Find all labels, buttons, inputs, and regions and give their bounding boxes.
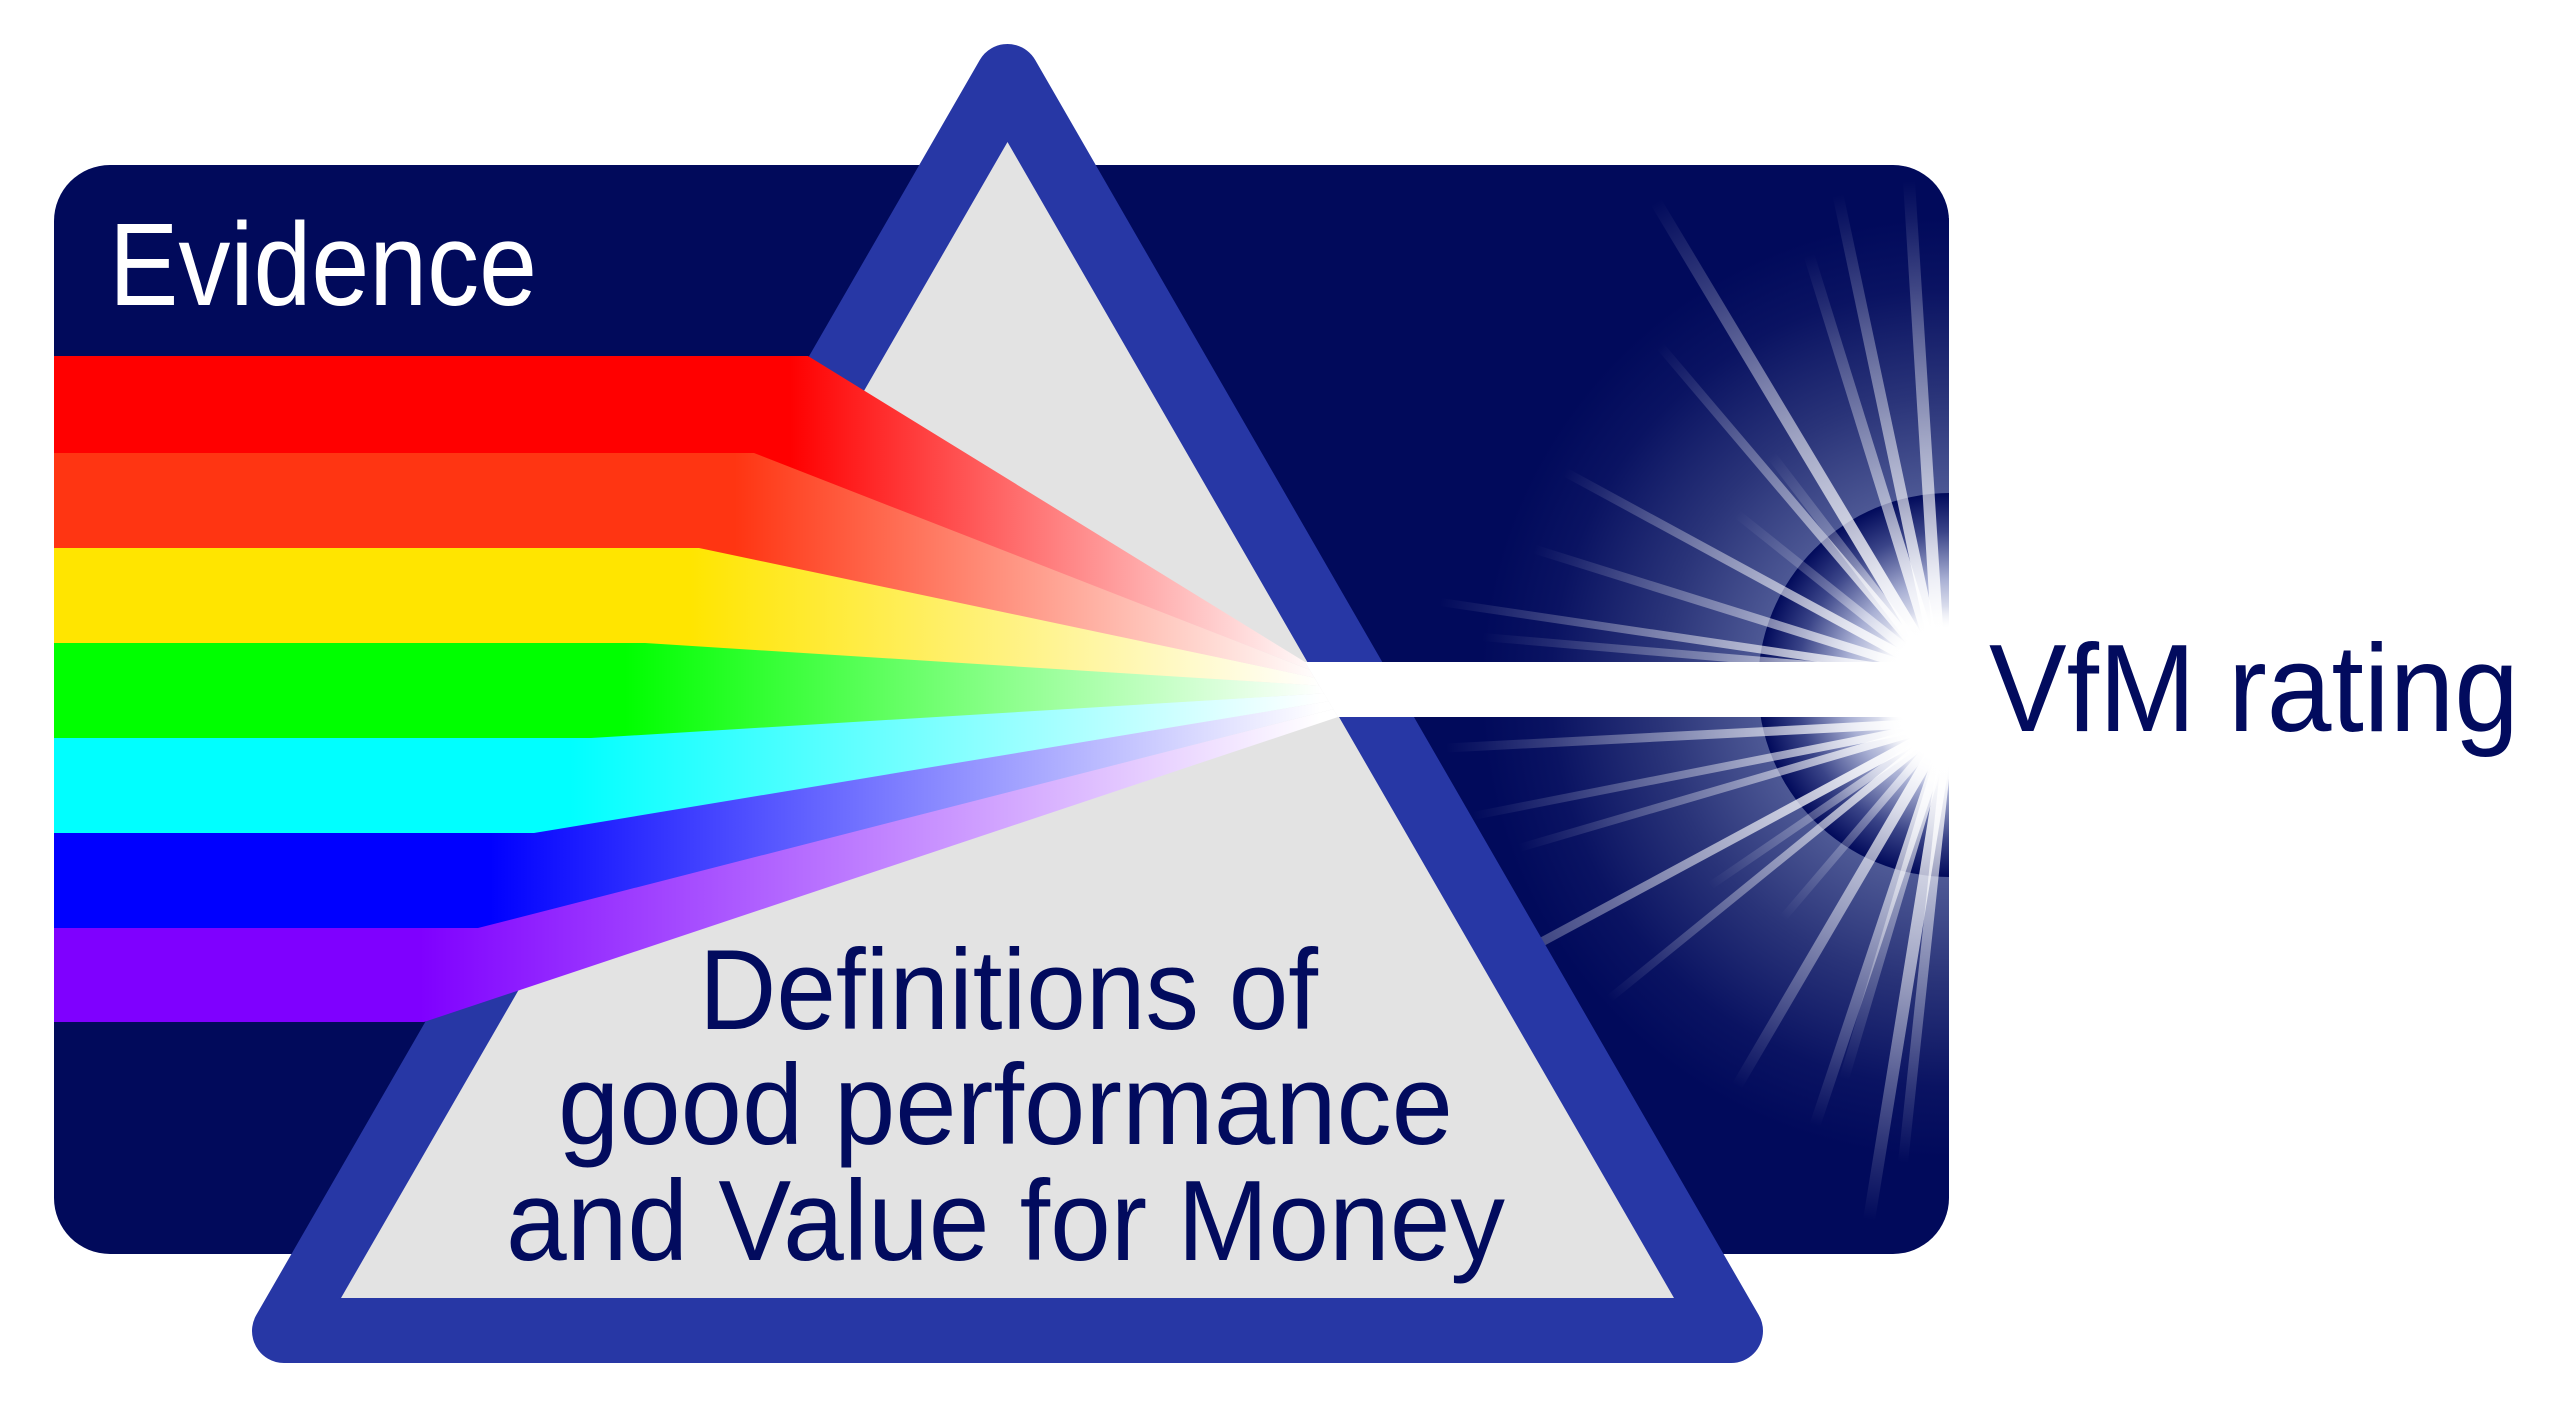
prism label [506, 927, 1505, 1285]
white output beam [1305, 662, 2000, 717]
band: blue [54, 701, 1333, 928]
outer glow [1544, 218, 1949, 1094]
band: cyan [54, 693, 1329, 833]
light rays [1440, 181, 1950, 1220]
prism label: good performance [558, 1042, 1453, 1169]
band: orange [54, 452, 1314, 678]
heading: Evidence: Evidence [109, 199, 537, 331]
inner core circle [1760, 493, 1949, 877]
upper flare [1872, 606, 2012, 746]
lower flare [1886, 730, 1949, 789]
band: green [54, 642, 1324, 738]
panel: navy background [54, 165, 1949, 1254]
band: violet [54, 709, 1338, 1022]
band: yellow [54, 547, 1319, 686]
prism: triangle frame and grey face [284, 76, 1731, 1331]
prism label: and Value for Money [506, 1158, 1505, 1285]
rainbow spectrum bands [54, 356, 1338, 1022]
light burst: glow and rays [1458, 197, 1949, 1206]
output label: VfM rating: VfM rating [1989, 620, 2519, 758]
prism label: Definitions of [699, 927, 1318, 1054]
band: red [54, 356, 1310, 670]
